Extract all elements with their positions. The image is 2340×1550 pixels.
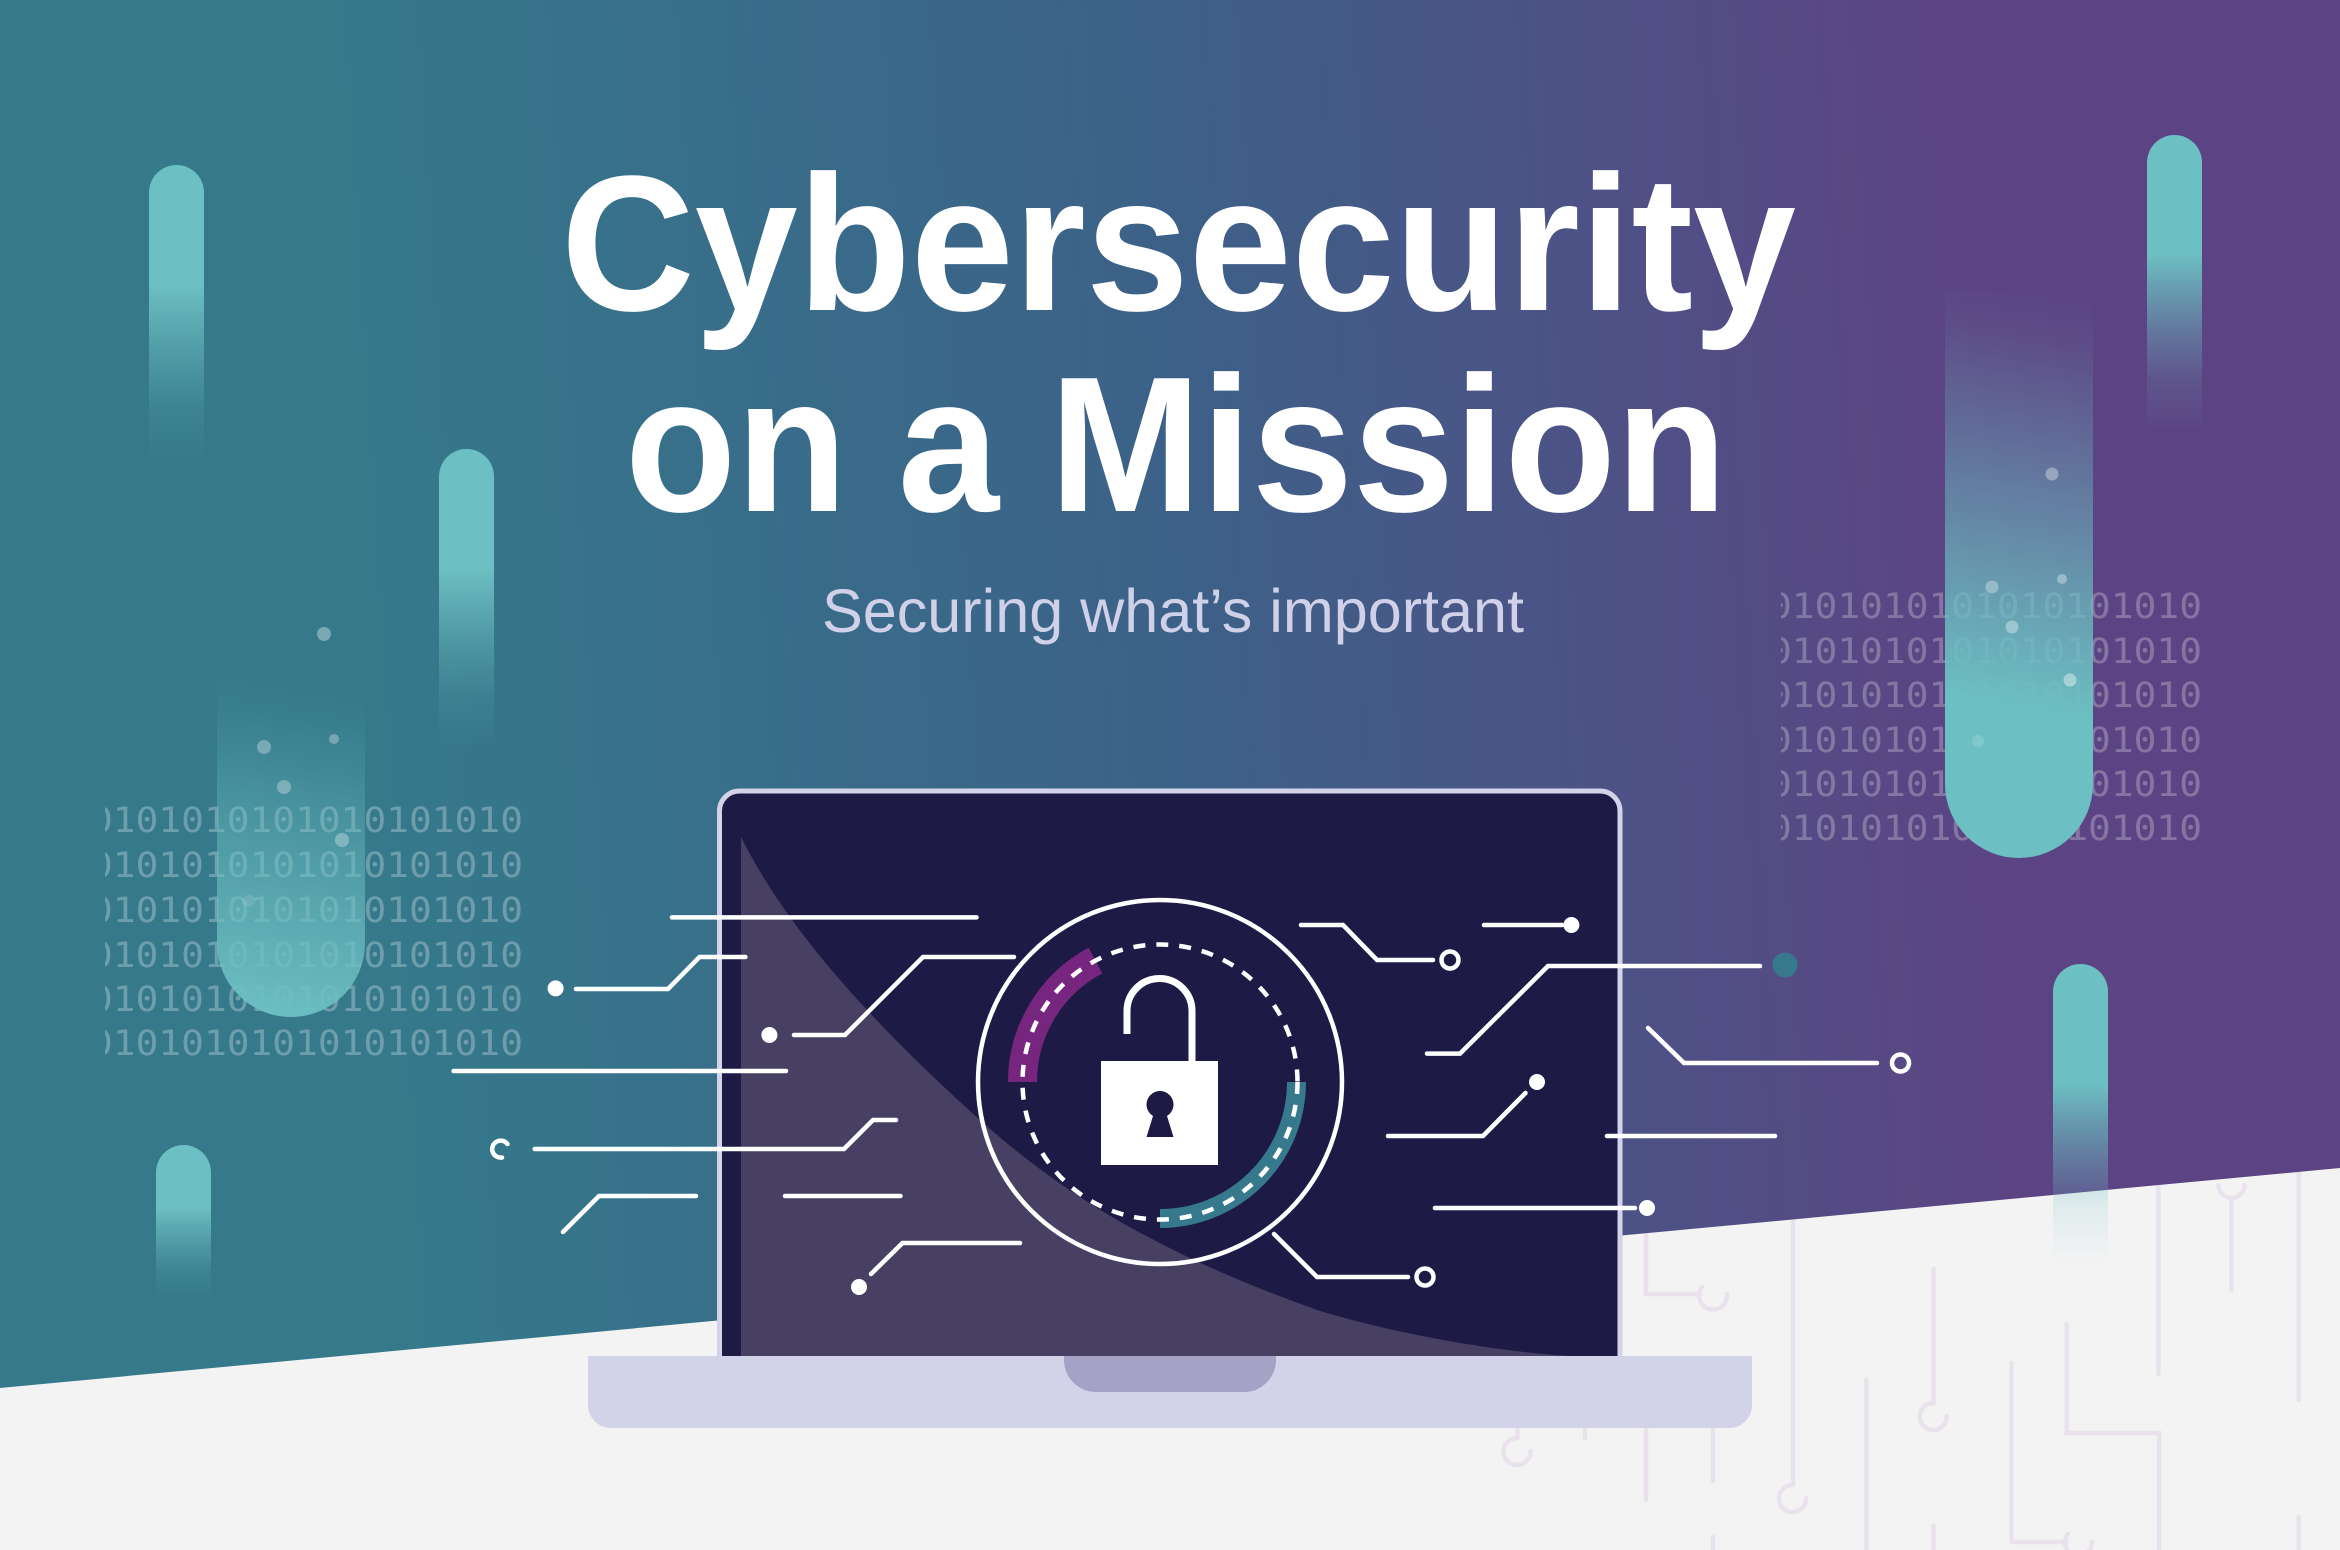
title: on a Mission bbox=[625, 336, 1727, 552]
pill: left top bbox=[149, 165, 204, 465]
keyhole bbox=[1146, 1091, 1174, 1137]
pill: right bottom bbox=[2053, 964, 2108, 1262]
laptop base bbox=[588, 1356, 1752, 1428]
binary text block right: 0101010101010101010 bbox=[1769, 721, 2202, 761]
binary text block right: 0101010101010101010 bbox=[1769, 765, 2202, 805]
pill: large left bbox=[217, 680, 365, 1017]
binary text block right: 0101010101010101010 bbox=[1769, 587, 2202, 627]
laptop bbox=[588, 791, 1752, 1428]
binary text block right: 0101010101010101010 bbox=[1769, 676, 2202, 716]
pill: right top bbox=[2147, 135, 2202, 432]
padlock shackle bbox=[1127, 978, 1192, 1061]
circuit lines: right bbox=[1274, 917, 1909, 1286]
subtitle: Securing what’s important bbox=[822, 577, 1524, 645]
dashed ring bbox=[1022, 944, 1298, 1220]
binary text block right bbox=[1769, 587, 2202, 849]
particles left bbox=[243, 627, 349, 907]
circuit lines: left bbox=[454, 917, 1020, 1295]
teal arc bbox=[1160, 1082, 1296, 1218]
binary text block left: 0101010101010101010 bbox=[90, 936, 523, 976]
binary text block left: 0101010101010101010 bbox=[90, 801, 523, 841]
pill: left second bbox=[439, 449, 494, 748]
purple arc bbox=[1022, 961, 1095, 1082]
binary text block right: 0101010101010101010 bbox=[1769, 809, 2202, 849]
binary text block right: 0101010101010101010 bbox=[1769, 632, 2202, 672]
laptop screen bbox=[720, 791, 1620, 1362]
title: Cybersecurity bbox=[561, 135, 1796, 351]
binary text block left: 0101010101010101010 bbox=[90, 1024, 523, 1064]
pill: left bottom bbox=[156, 1145, 211, 1300]
title bbox=[561, 135, 1796, 552]
pill: large right bbox=[1945, 290, 2093, 858]
padlock bbox=[1101, 978, 1218, 1165]
circuit traces on the floor bbox=[1504, 1170, 2299, 1550]
laptop notch bbox=[1064, 1356, 1276, 1392]
screen glare bbox=[741, 837, 1570, 1358]
binary text block left: 0101010101010101010 bbox=[90, 980, 523, 1020]
binary text block left bbox=[90, 801, 523, 1064]
particles right bbox=[1972, 468, 2076, 747]
binary text block left: 0101010101010101010 bbox=[90, 891, 523, 931]
data streams: falling pills bbox=[149, 135, 2202, 1300]
security dial bbox=[978, 900, 1342, 1264]
binary text block left: 0101010101010101010 bbox=[90, 846, 523, 886]
outer ring bbox=[978, 900, 1342, 1264]
padlock body bbox=[1101, 1061, 1218, 1165]
